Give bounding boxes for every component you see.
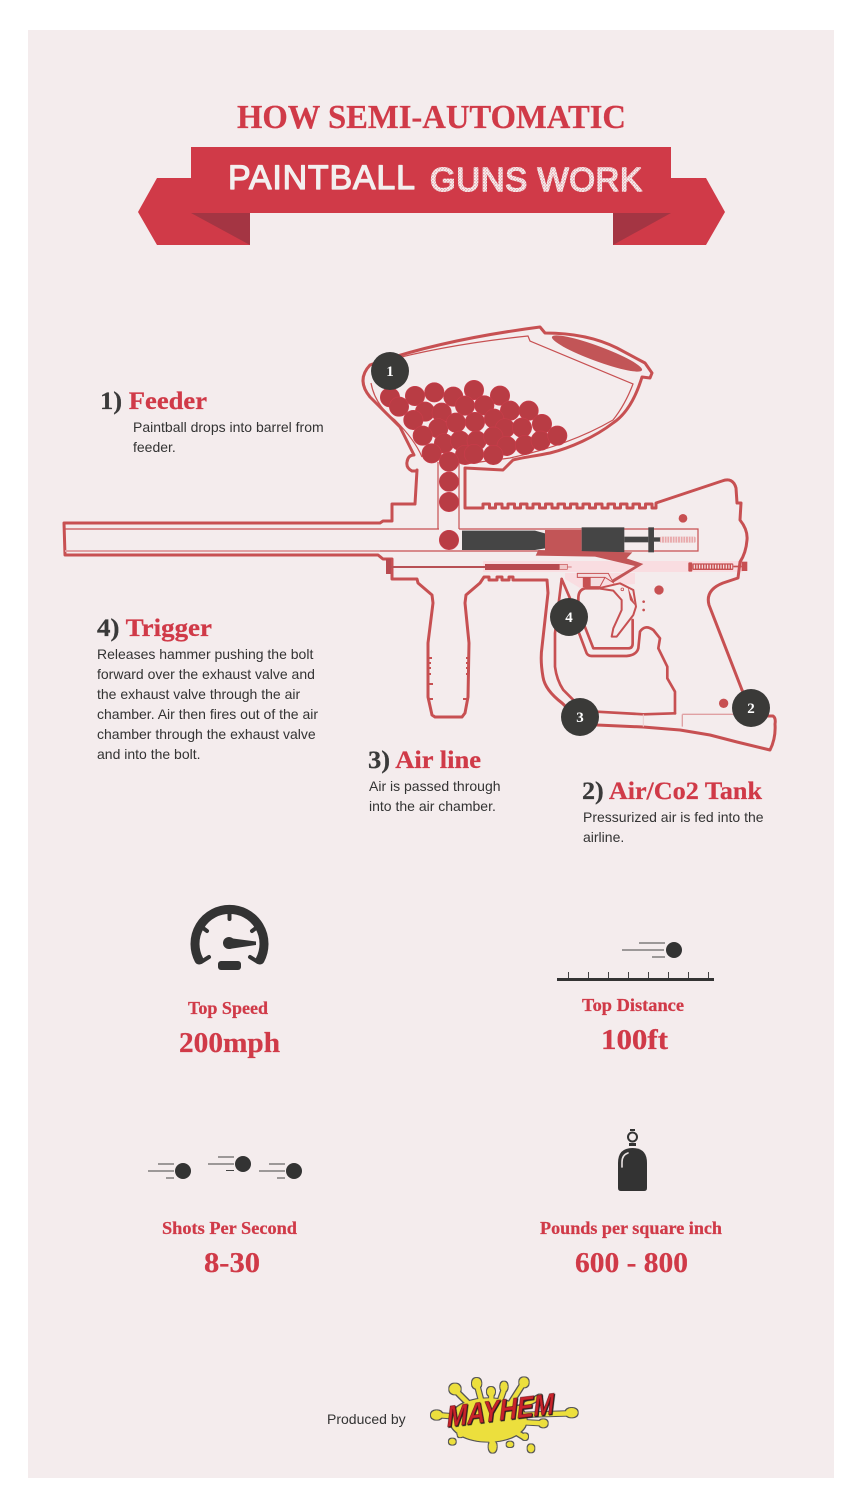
logo: Mayhem splat [431,1377,578,1453]
trigger guard and air line [555,579,675,714]
stat: top speed [179,998,280,1059]
paintball gun diagram [64,327,775,750]
text block: trigger: and into the bolt. [97,746,201,762]
text block: air tank: 2) Air/Co2 Tank [582,778,762,805]
stat: top distance: 100ft [601,1025,669,1056]
text block: trigger: chamber through the exhaust valve [97,726,316,742]
barrel lines [65,462,698,551]
sear [577,573,613,587]
icon: air tank [618,1129,647,1191]
number badge 3 [561,698,599,736]
title: HOW SEMI-AUTOMATIC [237,99,626,136]
stat: pounds per square inch: 600 - 800 [575,1248,688,1279]
grip texture [429,658,469,699]
text block: air line: Air is passed through [369,778,501,794]
text block: feeder [100,388,324,455]
text block: air line: into the air chamber. [369,798,496,814]
text block: trigger: forward over the exhaust valve and [97,666,315,682]
number badge 4 [550,598,588,636]
stat: shots per second [162,1218,297,1279]
stat: top distance [582,995,684,1056]
hopper inner line and vent [371,336,633,464]
pink highlight bands [483,561,743,588]
text block: trigger: the exhaust valve through the air [97,686,300,702]
stat: shots per second: 8-30 [204,1248,260,1279]
icon: speedometer [195,909,264,970]
number badge 3: 3 [576,710,584,726]
stat: shots per second: Shots Per Second [162,1218,297,1238]
producer credit: Produced by [327,1411,406,1427]
ribbon banner: GUNS WORK [430,161,642,198]
text block: air tank: Pressurized air is fed into the [583,809,764,825]
stat: pounds per square inch: Pounds per square inch [540,1218,722,1238]
number badge 2: 2 [747,701,755,717]
hammer [536,550,643,583]
stat: pounds per square inch [540,1218,722,1279]
ribbon banner [138,147,725,245]
hopper and gun body outline [64,327,775,750]
text block: air tank [582,778,764,845]
logo: Mayhem splat: MAYHEM [445,1387,557,1434]
number badge 1: 1 [386,364,394,380]
icon: distance ruler and ball [557,942,714,981]
internal mechanism [386,514,747,727]
text block: trigger: chamber. Air then fires out of the air [97,706,318,722]
text block: trigger: 4) Trigger [97,615,212,642]
text block: trigger [97,615,318,762]
trigger [598,583,636,637]
springs and rods [391,566,485,568]
icon: three flying paintballs [148,1156,302,1179]
paintballs [380,380,567,550]
text block: air tank: airline. [583,829,624,845]
text block: trigger: Releases hammer pushing the bolt [97,646,313,662]
stat: top speed: Top Speed [188,998,268,1018]
text block: feeder: feeder. [133,439,176,455]
text block: air line: 3) Air line [368,747,481,774]
ribbon banner: PAINTBALL [228,159,415,197]
number badge 1 [371,352,409,390]
bolt [462,531,545,550]
text block: air line [368,747,501,814]
number badge 2 [732,689,770,727]
text block: feeder: Paintball drops into barrel from [133,419,324,435]
number badge 4: 4 [565,610,573,626]
stat: top speed: 200mph [179,1028,280,1059]
text block: feeder: 1) Feeder [100,388,207,415]
stat: top distance: Top Distance [582,995,684,1015]
